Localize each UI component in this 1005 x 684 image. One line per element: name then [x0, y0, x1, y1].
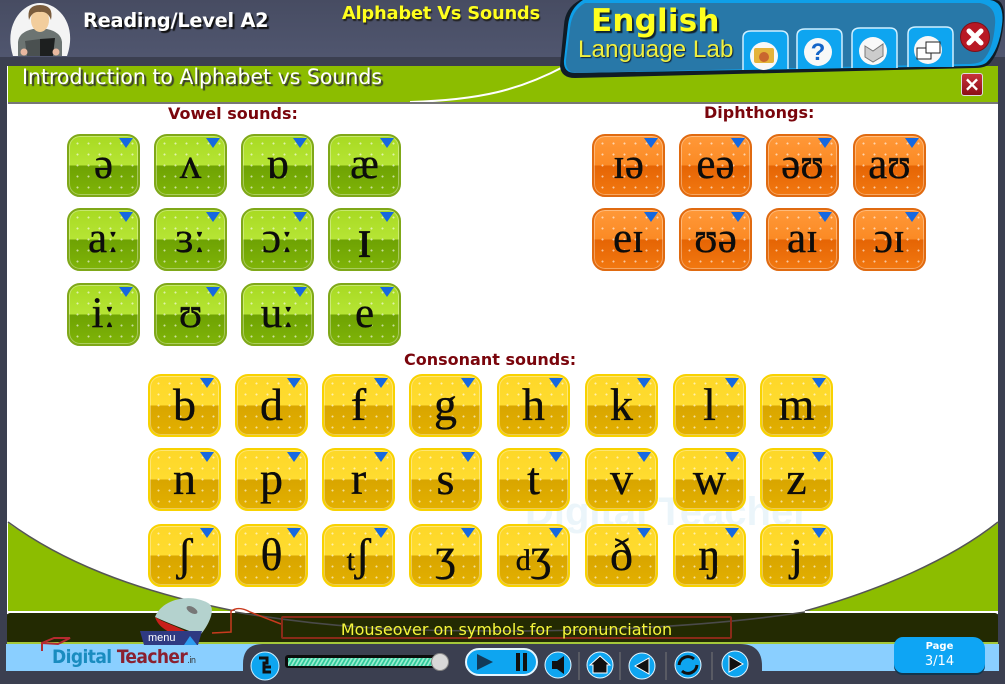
panel: diphthong buttons: eɪ: [613, 215, 644, 262]
icon: reader avatar: [10, 3, 70, 56]
page indicator: [894, 637, 985, 673]
instruction bar: [281, 616, 732, 639]
panel: consonant buttons: θ: [260, 529, 283, 580]
panel: vowel buttons: ɒ: [266, 141, 289, 188]
icon: mouse menu: menu: [148, 632, 176, 644]
panel: consonant buttons: w: [693, 453, 726, 504]
panel: consonant buttons: h: [522, 379, 545, 430]
panel: vowel buttons: ɜː: [175, 215, 206, 262]
top bar background: [0, 0, 1005, 57]
panel: consonant buttons: d: [260, 379, 283, 430]
player controls: [250, 648, 748, 680]
logo: Digital Teacher: [41, 637, 196, 668]
panel: consonant buttons: j: [790, 529, 803, 580]
panel: consonant buttons: b: [173, 379, 196, 430]
panel: vowel buttons: ɪ: [357, 208, 372, 270]
panel: diphthong buttons: ɪə: [613, 141, 644, 188]
panel: vowel buttons: ʊ: [179, 290, 202, 337]
logo text: English: English: [591, 3, 720, 39]
panel: consonant buttons: v: [610, 453, 633, 504]
panel: consonant buttons: p: [260, 453, 283, 504]
panel: vowel buttons: ʌ: [180, 141, 201, 188]
panel: consonant buttons: r: [351, 453, 366, 504]
panel: consonant buttons: k: [610, 379, 633, 430]
panel: vowel buttons: e: [355, 290, 374, 337]
panel: diphthong buttons: aɪ: [787, 215, 818, 262]
panel: vowel buttons: iː: [92, 290, 115, 337]
panel: vowel buttons: aː: [88, 215, 119, 262]
page number: 3/14: [925, 654, 954, 669]
panel: consonant buttons: f: [351, 379, 366, 430]
panel: consonant buttons: m: [779, 379, 814, 430]
heading: diphthongs: Diphthongs:: [704, 103, 814, 122]
heading: consonant sounds: Consonant sounds:: [404, 350, 576, 369]
panel: consonant buttons: n: [173, 453, 196, 504]
icon: mouse menu: [140, 598, 281, 645]
panel: diphthong buttons: eə: [696, 141, 735, 188]
panel: consonant buttons: ʒ: [435, 529, 456, 580]
panel: vowel buttons: ɔː: [262, 215, 293, 262]
panel: English Language Lab: ?: [811, 39, 825, 66]
instruction bar: Mouseover on symbols for pronunciation: [341, 620, 672, 639]
panel: consonant buttons: z: [786, 453, 807, 504]
panel: consonant buttons: l: [703, 379, 716, 430]
panel: consonant buttons: tʃ: [347, 529, 370, 580]
icon: panel close: ×: [964, 72, 980, 96]
panel: diphthong buttons: ʊə: [694, 215, 737, 262]
panel: consonant buttons: dʒ: [516, 529, 551, 580]
panel: consonant buttons: ŋ: [698, 529, 721, 580]
panel: vowel buttons: uː: [261, 290, 294, 337]
panel: vowel buttons: [67, 134, 401, 346]
panel: English Language Lab: [560, 0, 1004, 78]
panel: diphthong buttons: [592, 134, 926, 271]
panel: consonant buttons: ʃ: [177, 529, 192, 580]
panel: consonant buttons: t: [527, 453, 540, 504]
panel: diphthong buttons: əʊ: [781, 141, 824, 188]
panel: consonant buttons: [148, 374, 833, 587]
title: Introduction to Alphabet vs Sounds: [22, 65, 382, 89]
heading: level: Reading/Level A2: [83, 9, 268, 32]
page label: Page: [926, 641, 953, 652]
logo text: Language Lab: Language Lab: [578, 36, 733, 63]
logo: Digital Teacher: Digital Teacher.in: [52, 646, 195, 668]
panel: diphthong buttons: aʊ: [868, 141, 911, 188]
panel: consonant buttons: s: [437, 453, 454, 504]
watermark: Digital Teacher: [525, 490, 809, 534]
heading: topic: Alphabet Vs Sounds: [342, 4, 540, 24]
heading: vowel sounds: Vowel sounds:: [168, 104, 298, 123]
panel: diphthong buttons: ɔɪ: [874, 215, 905, 262]
panel: vowel buttons: æ: [350, 141, 379, 188]
panel: consonant buttons: ð: [610, 529, 633, 580]
panel: consonant buttons: g: [434, 379, 457, 430]
panel: vowel buttons: ə: [94, 141, 113, 188]
